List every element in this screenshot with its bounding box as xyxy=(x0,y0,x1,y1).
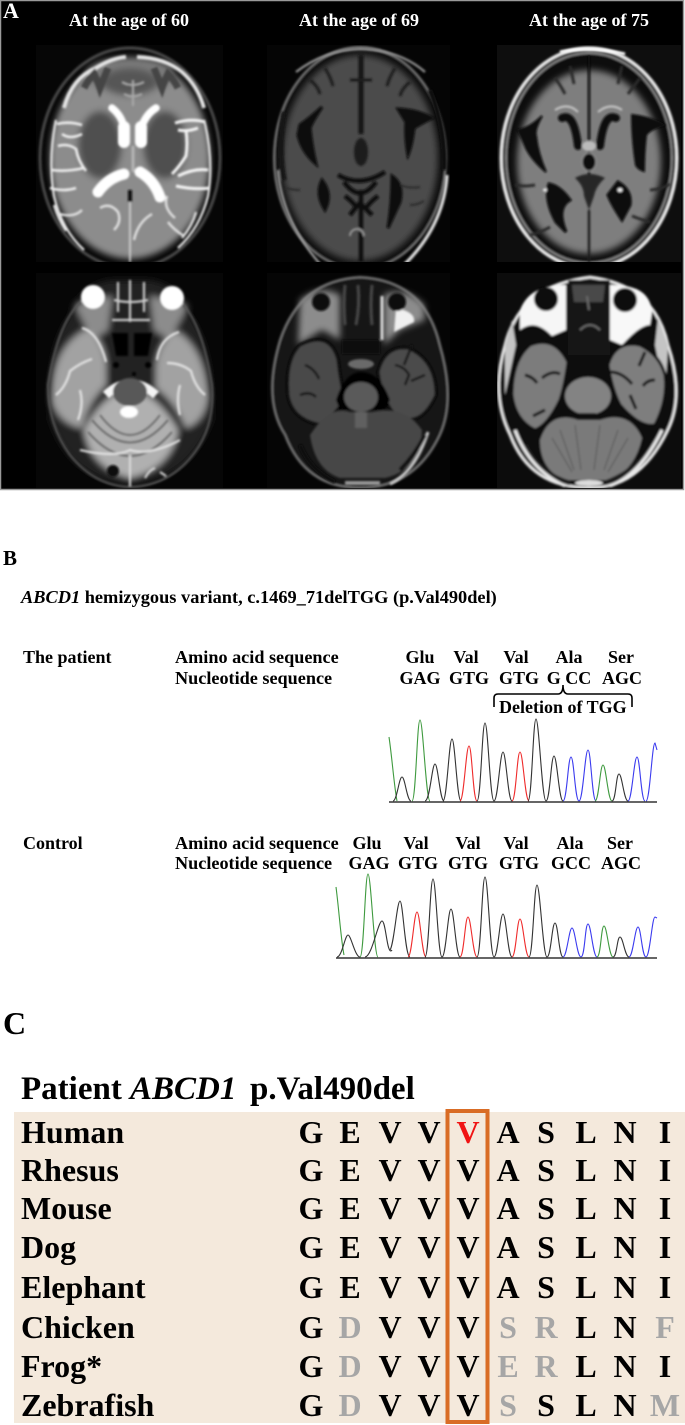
residues: Human: L xyxy=(575,1114,597,1150)
residues: Mouse: E xyxy=(339,1190,361,1226)
alignment background xyxy=(14,1112,685,1423)
codon table: control: Ser xyxy=(607,833,633,853)
residues: Dog: E xyxy=(339,1229,361,1265)
codon table: patient: Val xyxy=(453,647,479,667)
codon table: control: GTG xyxy=(398,853,438,873)
residues: Dog: V xyxy=(417,1229,441,1265)
residues: Mouse: A xyxy=(496,1190,520,1226)
residues: Chicken: F xyxy=(655,1309,675,1345)
residues: Elephant: L xyxy=(575,1269,597,1305)
panel C: conservation alignment xyxy=(3,1005,685,1423)
residues: Chicken: D xyxy=(338,1309,362,1345)
residues: Dog: G xyxy=(299,1229,324,1265)
row label: the patient: The patient xyxy=(23,647,112,667)
sequence labels: patient: Nucleotide sequence xyxy=(175,668,332,688)
residues: Rhesus: I xyxy=(659,1152,671,1188)
alignment title: ABCD1 xyxy=(128,1071,236,1107)
MRI: age 75 upper slice xyxy=(497,45,681,268)
variant description: ABCD1 hemizygous variant, c.1469_71delTGG (p.Val490del) xyxy=(20,587,497,608)
heading: age 60: At the age of 60 xyxy=(69,10,189,30)
residues: Mouse: V xyxy=(378,1190,402,1226)
residues: Mouse: G xyxy=(299,1190,324,1226)
residues: Human: G xyxy=(299,1114,324,1150)
residues: Dog: A xyxy=(496,1229,520,1265)
codon table: patient: GTG xyxy=(449,668,489,688)
species names: Chicken xyxy=(21,1309,135,1345)
residues: Human: V xyxy=(456,1114,480,1150)
sequence labels: control: Nucleotide sequence xyxy=(175,853,332,873)
residues: Elephant: V xyxy=(456,1269,480,1305)
residues: Human: N xyxy=(613,1114,637,1150)
residues: Zebrafish: S xyxy=(537,1387,555,1423)
species names xyxy=(21,1114,155,1423)
residues: Dog: V xyxy=(378,1229,402,1265)
chromatogram: control xyxy=(336,874,657,958)
MRI: age 75 lower slice xyxy=(497,273,681,488)
residues: Mouse: L xyxy=(575,1190,597,1226)
codon table: patient: AGC xyxy=(602,668,642,688)
residues: Frog: L xyxy=(575,1348,597,1384)
residues: Human: I xyxy=(659,1114,671,1150)
residues: Rhesus: G xyxy=(299,1152,324,1188)
residues: Chicken xyxy=(299,1309,675,1345)
residues: Chicken: S xyxy=(499,1309,517,1345)
residues: Rhesus: V xyxy=(456,1152,480,1188)
codon table: control: GTG xyxy=(448,853,488,873)
residues: Elephant: E xyxy=(339,1269,361,1305)
codon table: control: AGC xyxy=(601,853,641,873)
residues: Dog: S xyxy=(537,1229,555,1265)
residues: Chicken: L xyxy=(575,1309,597,1345)
residues: Mouse xyxy=(299,1190,671,1226)
residues: Dog: V xyxy=(456,1229,480,1265)
codon table: control: Val xyxy=(455,833,481,853)
residues: Chicken: N xyxy=(613,1309,637,1345)
bracket: deletion of TGG: Deletion of TGG xyxy=(499,697,627,717)
residues: Frog: V xyxy=(378,1348,402,1384)
sequence labels: patient xyxy=(175,647,339,688)
species names: Elephant xyxy=(21,1269,146,1305)
residues: Elephant: A xyxy=(496,1269,520,1305)
sequence labels: patient: Amino acid sequence xyxy=(175,647,339,667)
species names: Zebrafish xyxy=(21,1387,155,1423)
residues: Zebrafish: V xyxy=(417,1387,441,1423)
residues: Human: V xyxy=(378,1114,402,1150)
residues: Zebrafish: S xyxy=(499,1387,517,1423)
residues: Dog xyxy=(299,1229,671,1265)
codon table: control: Val xyxy=(403,833,429,853)
residues: Chicken: V xyxy=(456,1309,480,1345)
residues: Dog: N xyxy=(613,1229,637,1265)
codon table: patient: G CC xyxy=(547,668,591,688)
highlight box: variant column xyxy=(448,1111,488,1422)
residues: Chicken: G xyxy=(299,1309,324,1345)
panel A: brain MRI series xyxy=(0,0,684,490)
residues: Chicken: V xyxy=(417,1309,441,1345)
residues: Elephant: N xyxy=(613,1269,637,1305)
codon table: control: GTG xyxy=(499,853,539,873)
MRI: age 69 lower slice xyxy=(267,273,450,488)
residues: Mouse: V xyxy=(417,1190,441,1226)
residues: Rhesus: E xyxy=(339,1152,361,1188)
residues: Zebrafish xyxy=(299,1387,680,1423)
heading: age 75: At the age of 75 xyxy=(529,10,649,30)
residues: Mouse: V xyxy=(456,1190,480,1226)
codon table: control: GCC xyxy=(551,853,591,873)
residues: Mouse: S xyxy=(537,1190,555,1226)
heading: age 69: At the age of 69 xyxy=(299,10,419,30)
bracket: deletion of TGG xyxy=(494,685,632,717)
residues: Human: S xyxy=(537,1114,555,1150)
residues: Frog: V xyxy=(456,1348,480,1384)
residues: Elephant: V xyxy=(417,1269,441,1305)
residues: Rhesus xyxy=(299,1152,671,1188)
residues: Zebrafish: L xyxy=(575,1387,597,1423)
residues: Elephant: I xyxy=(659,1269,671,1305)
codon table: control: Ala xyxy=(556,833,584,853)
codon table: patient: Glu xyxy=(405,647,435,667)
residues: Elephant xyxy=(299,1269,671,1305)
sequence labels: control: Amino acid sequence xyxy=(175,833,339,853)
species names: Dog xyxy=(21,1229,76,1265)
alignment title: Patient xyxy=(21,1071,122,1107)
residues: Rhesus: V xyxy=(378,1152,402,1188)
codon table: control xyxy=(348,833,641,873)
residues: Rhesus: S xyxy=(537,1152,555,1188)
residues: Chicken: R xyxy=(534,1309,558,1345)
MRI: age 60 upper slice xyxy=(36,45,223,268)
panel letter C: C xyxy=(3,1005,26,1041)
species names: Frog* xyxy=(21,1348,102,1384)
residues: Frog: D xyxy=(338,1348,362,1384)
MRI: age 60 lower slice xyxy=(36,273,223,488)
residues: Frog: I xyxy=(659,1348,671,1384)
residues: Human xyxy=(299,1114,671,1150)
alignment title: p.Val490del xyxy=(250,1071,415,1107)
residues: Rhesus: V xyxy=(417,1152,441,1188)
residues: Dog: I xyxy=(659,1229,671,1265)
residues: Zebrafish: G xyxy=(299,1387,324,1423)
residues: Frog: G xyxy=(299,1348,324,1384)
codon table: control: GAG xyxy=(348,853,390,873)
codon table: patient: Ser xyxy=(608,647,634,667)
residues: Mouse: N xyxy=(613,1190,637,1226)
residues: Human: A xyxy=(496,1114,520,1150)
panel B: sequencing xyxy=(3,546,657,958)
residues: Rhesus: A xyxy=(496,1152,520,1188)
residues: Frog: E xyxy=(497,1348,519,1384)
residues: Frog xyxy=(299,1348,671,1384)
residues: Elephant: V xyxy=(378,1269,402,1305)
residues: Human: E xyxy=(339,1114,361,1150)
panel letter B: B xyxy=(3,546,17,570)
codon table: patient: Ala xyxy=(556,647,582,667)
residues: Zebrafish: N xyxy=(613,1387,637,1423)
residues: Human: V xyxy=(417,1114,441,1150)
residues: Zebrafish: V xyxy=(378,1387,402,1423)
residues: Zebrafish: V xyxy=(456,1387,480,1423)
residues: Elephant: S xyxy=(537,1269,555,1305)
codon table: patient xyxy=(399,647,642,688)
residues: Rhesus: N xyxy=(613,1152,637,1188)
residues: Frog: V xyxy=(417,1348,441,1384)
codon table: patient: GAG xyxy=(399,668,441,688)
residues: Zebrafish: D xyxy=(338,1387,362,1423)
species names: Mouse xyxy=(21,1190,112,1226)
residues: Elephant: G xyxy=(299,1269,324,1305)
MRI: age 69 upper slice xyxy=(267,45,450,269)
residues: Zebrafish: M xyxy=(650,1387,680,1423)
codon table: control: Glu xyxy=(352,833,382,853)
residues: Frog: R xyxy=(534,1348,558,1384)
chromatogram: patient xyxy=(389,719,657,802)
residues: Rhesus: L xyxy=(575,1152,597,1188)
codon table: control: Val xyxy=(503,833,529,853)
residues: Frog: N xyxy=(613,1348,637,1384)
residues: Mouse: I xyxy=(659,1190,671,1226)
species names: Rhesus xyxy=(21,1152,119,1188)
codon table: patient: GTG xyxy=(499,668,539,688)
residues: Chicken: V xyxy=(378,1309,402,1345)
alignment title xyxy=(21,1071,415,1107)
sequence labels: control xyxy=(175,833,339,873)
codon table: patient: Val xyxy=(503,647,529,667)
row label: control: Control xyxy=(23,833,83,853)
species names: Human xyxy=(21,1114,124,1150)
residues: Dog: L xyxy=(575,1229,597,1265)
